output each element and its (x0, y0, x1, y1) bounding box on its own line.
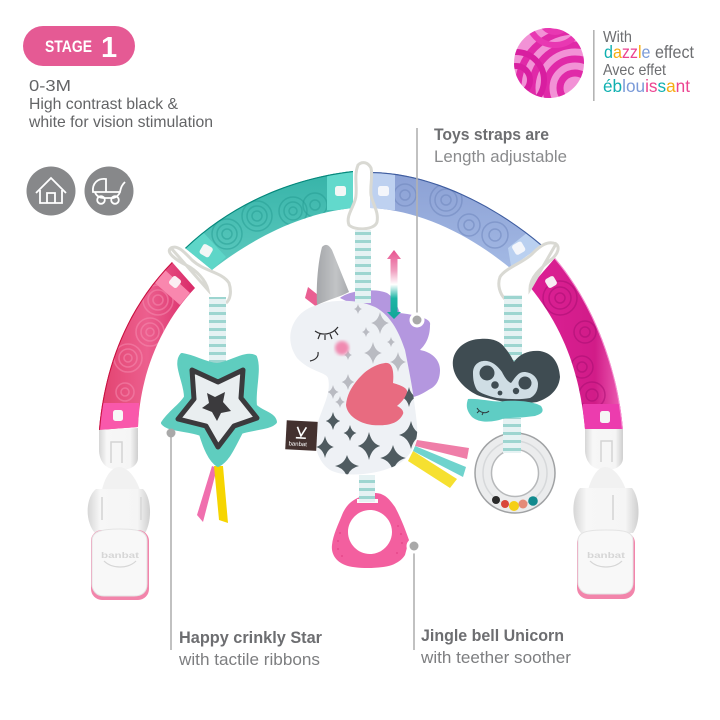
arch: teal segment (185, 170, 354, 270)
arch: blue segment (370, 170, 545, 272)
callout line: unicorn (406, 538, 422, 650)
unicorn mane (340, 290, 440, 397)
right hanging clip (499, 243, 558, 299)
butterfly body (467, 399, 543, 422)
left clamp: banbat (101, 550, 139, 560)
stage description (28, 78, 213, 131)
dazzle text: éblouissant (603, 76, 690, 96)
rattle ring (475, 433, 555, 513)
callout text: star: Happy crinkly Star (179, 628, 322, 647)
callout line: star (166, 428, 176, 650)
stage description: High contrast black & (29, 96, 178, 113)
star ribbons (197, 466, 228, 523)
arch: right magenta segment (530, 258, 625, 431)
callout text: straps (434, 126, 567, 166)
callout text: unicorn: with teether soother (420, 648, 571, 667)
arch: left pink segment (99, 262, 195, 430)
stage badge (23, 26, 135, 66)
icon: stroller (84, 166, 134, 216)
left clamp (88, 428, 150, 600)
butterfly ring strap (503, 418, 521, 453)
callout text: star (178, 628, 322, 669)
star toy (163, 297, 275, 523)
teether (332, 475, 409, 568)
butterfly rattle (453, 295, 560, 513)
dazzle text (603, 29, 694, 96)
unicorn ribbons (408, 440, 469, 488)
adjustment arrow (387, 250, 401, 319)
stage badge: STAGE (45, 37, 92, 56)
right clamp (573, 429, 639, 599)
callout text: straps: Length adjustable (434, 147, 567, 166)
callout line: straps (410, 128, 424, 328)
unicorn eye and mouth (310, 327, 338, 361)
icon: house (26, 166, 76, 216)
unicorn ear (305, 287, 318, 308)
unicorn wing (346, 363, 407, 425)
unicorn toy (285, 230, 469, 488)
callout text: unicorn (420, 626, 571, 667)
callout text: unicorn: Jingle bell Unicorn (421, 626, 564, 645)
dazzle text: With (603, 29, 632, 46)
butterfly markings (473, 361, 538, 399)
divider line (593, 30, 595, 101)
unicorn body (290, 301, 417, 474)
dazzle effect swatch (514, 28, 584, 98)
star strap (209, 297, 226, 363)
unicorn cheek (335, 341, 349, 355)
stage badge: 1 (101, 32, 117, 64)
stage description: white for vision stimulation (28, 114, 213, 131)
unicorn tag (285, 420, 318, 451)
dazzle text: dazzle effect (604, 42, 694, 62)
dazzle text: Avec effet (603, 62, 666, 79)
left hanging clip (169, 247, 230, 303)
callout text: star: with tactile ribbons (178, 650, 320, 669)
star body (163, 355, 275, 465)
butterfly wings (453, 339, 560, 403)
unicorn tag: banbat (288, 441, 307, 448)
unicorn horn (317, 245, 349, 305)
right clamp: banbat (587, 550, 625, 560)
unicorn strap (355, 230, 371, 303)
unicorn stars (316, 304, 423, 477)
butterfly top strap (504, 295, 522, 365)
center hanging clip (348, 163, 377, 229)
callout text: straps: Toys straps are (434, 126, 549, 144)
stage description: 0-3M (29, 78, 71, 95)
